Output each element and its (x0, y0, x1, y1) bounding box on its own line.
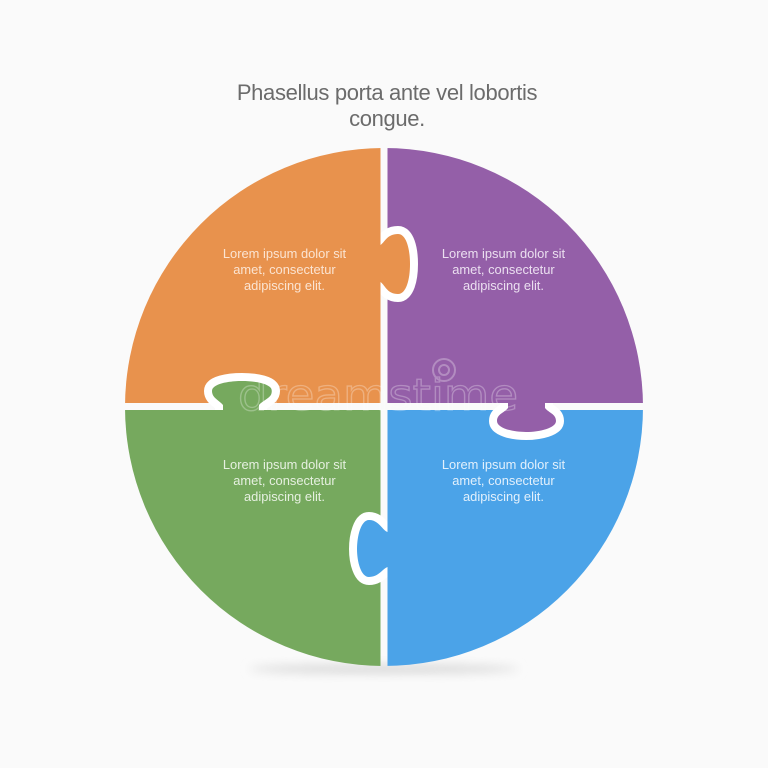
text: orange piece: adipiscing elit. (244, 278, 325, 293)
watermark: dreamstime (238, 370, 518, 421)
tab: purple knob (497, 399, 556, 432)
text: blue piece: Lorem ipsum dolor sit (442, 457, 566, 472)
text: green piece: Lorem ipsum dolor sit (223, 457, 347, 472)
title: congue. (349, 106, 425, 131)
tab: orange knob (376, 234, 410, 294)
puzzle circle (120, 140, 652, 675)
panel: blue piece (388, 410, 652, 675)
text: blue piece: amet, consectetur (452, 473, 555, 488)
text: purple piece: amet, consectetur (452, 262, 555, 277)
tab: blue knob (357, 520, 392, 577)
text: orange piece: amet, consectetur (233, 262, 336, 277)
text: orange piece: Lorem ipsum dolor sit (223, 246, 347, 261)
text: green piece: amet, consectetur (233, 473, 336, 488)
text: green piece (223, 457, 347, 504)
text: purple piece: Lorem ipsum dolor sit (442, 246, 566, 261)
text: orange piece (223, 246, 347, 293)
text: blue piece: adipiscing elit. (463, 489, 544, 504)
tab: green knob (212, 381, 272, 414)
title: Phasellus porta ante vel lobortis (237, 80, 537, 105)
panel: orange piece (120, 140, 380, 403)
drop shadow (249, 665, 519, 673)
title (237, 80, 537, 131)
text: purple piece (442, 246, 566, 293)
text: green piece: adipiscing elit. (244, 489, 325, 504)
panel: purple piece (388, 140, 652, 403)
panel: green piece (120, 410, 380, 675)
text: blue piece (442, 457, 566, 504)
text: purple piece: adipiscing elit. (463, 278, 544, 293)
